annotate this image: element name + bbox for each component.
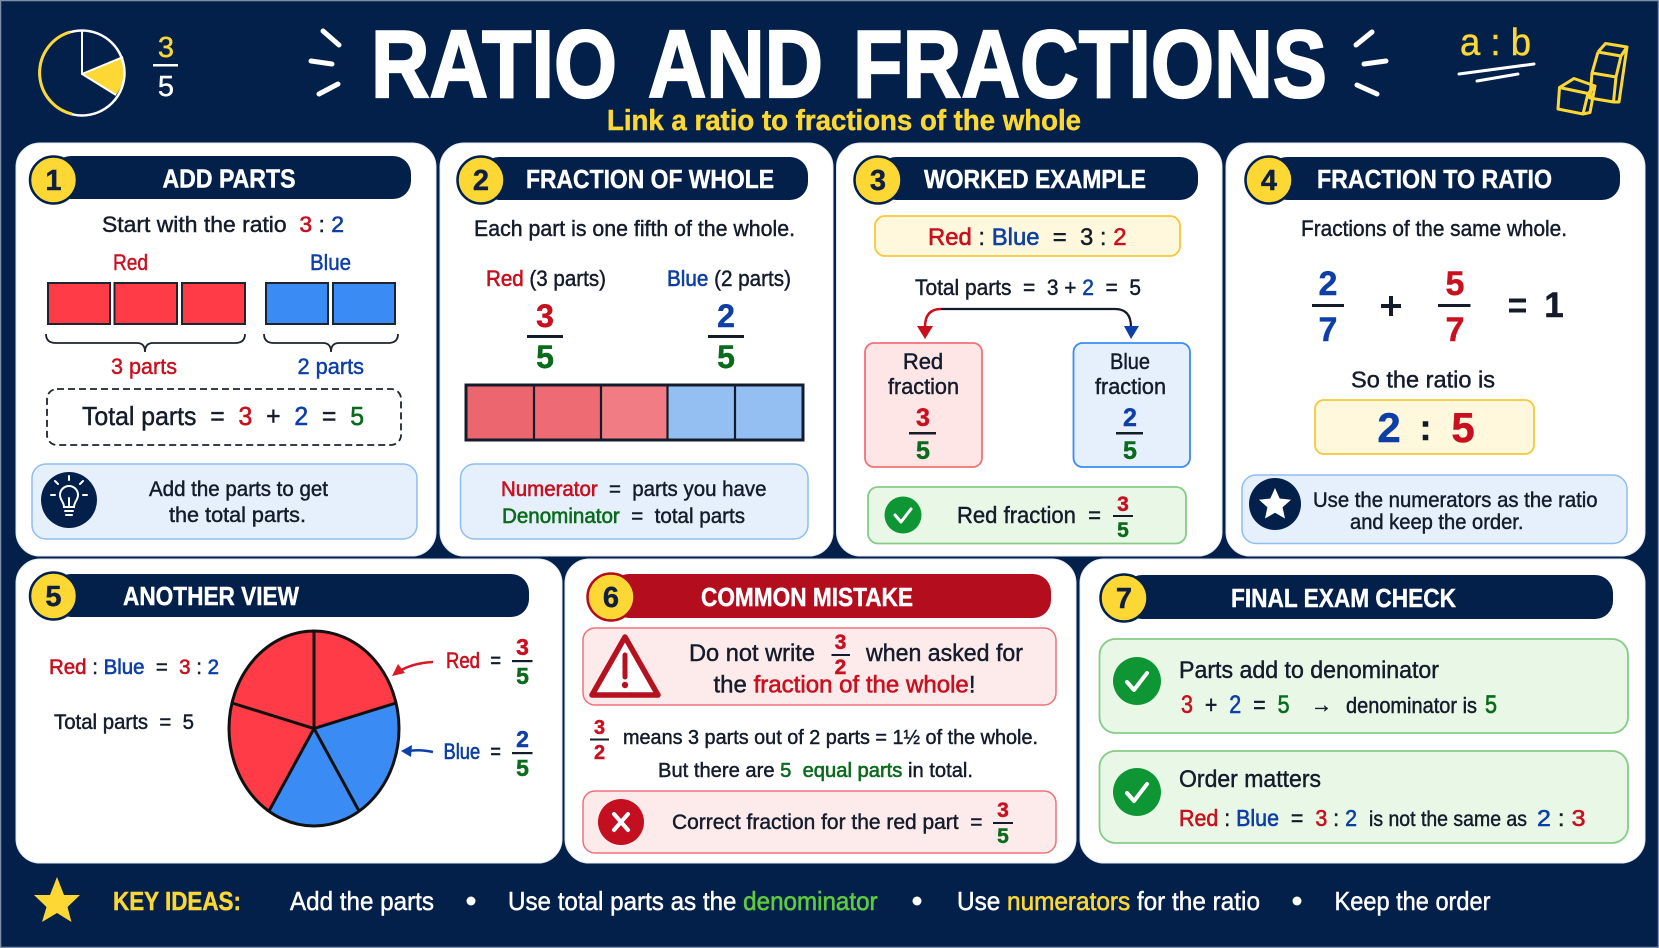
box: red fraction answer: 5: [1117, 519, 1129, 542]
brace: three parts: [46, 334, 245, 352]
dashed box: total parts: Total parts = 3 + 2 = 5: [82, 401, 364, 431]
text: each part is one fifth: Each part is one fifth of the whole.: [474, 216, 795, 241]
label: blue two fifths: 2: [516, 726, 529, 752]
heading: fraction to ratio: FRACTION TO RATIO: [1317, 164, 1552, 194]
footer: key ideas strip: [34, 877, 1491, 922]
icon: pie with fraction three fifths: [40, 30, 178, 116]
label: red: Red: [113, 250, 148, 275]
label: blue: Blue: [310, 250, 351, 275]
box: red fraction: 5: [916, 437, 930, 465]
warning box: 2: [835, 656, 846, 679]
heading: final exam check: [1100, 574, 1613, 622]
equation: equals one: [1509, 286, 1564, 325]
label: red three fifths: 5: [516, 663, 529, 689]
heading: common mistake: 6: [603, 582, 619, 614]
text: red to blue ratio: Red : Blue = 3 : 2: [49, 656, 219, 679]
heading: common mistake: COMMON MISTAKE: [701, 582, 913, 612]
check box: parts add to denominator: →: [1311, 692, 1332, 717]
fraction: two fifths: 2: [717, 298, 735, 334]
check box: order matters: Red : Blue = 3 : 2: [1179, 805, 1357, 831]
label: blue two parts: Blue (2 parts): [667, 266, 791, 291]
check box: order matters: is not the same as: [1369, 808, 1527, 831]
label: 3 parts: 3 parts: [111, 354, 177, 379]
heading: fraction to ratio: [1246, 156, 1620, 204]
box: ratio two to five: [1315, 400, 1534, 454]
check box: parts add to denominator: Parts add to denominator: [1179, 657, 1439, 684]
box: correct fraction: 5: [997, 825, 1009, 848]
box: blue fraction: [1074, 343, 1190, 467]
box: blue fraction: 2: [1123, 404, 1137, 432]
label: red three fifths: Red =: [446, 648, 501, 673]
box: blue fraction: 5: [1123, 437, 1137, 465]
panel: add parts: [16, 143, 436, 556]
heading: another view: ANOTHER VIEW: [123, 581, 299, 611]
heading: add parts: [30, 156, 411, 204]
heading: another view: [30, 572, 529, 620]
check box: parts add to denominator: 5: [1485, 691, 1497, 719]
heading: fraction of whole: FRACTION OF WHOLE: [526, 164, 774, 194]
box: ratio two to five: 5: [1451, 404, 1475, 451]
title: RATIO: [371, 11, 617, 118]
text: numerators for the ratio: Use numerators for the ratio: [957, 886, 1260, 916]
box: correct fraction: [583, 791, 1056, 853]
icon: check: [884, 496, 922, 534]
decoration: right title sparks: [1356, 32, 1386, 94]
text: add the parts: Add the parts: [290, 886, 434, 916]
dashed box: total parts: [47, 389, 401, 445]
box: ratio two to five: :: [1420, 407, 1432, 448]
fraction: two sevenths: 2: [1319, 265, 1337, 303]
text: total parts sum: Total parts = 3 + 2 = 5: [915, 275, 1141, 300]
icon: yellow star: [34, 877, 80, 922]
heading: another view: 5: [45, 581, 62, 613]
symbol: plus: [1381, 296, 1401, 316]
explanation: three over two: 2: [594, 742, 605, 764]
callout: add the parts: Add the parts to get: [149, 478, 328, 501]
callout: add the parts: the total parts.: [169, 504, 306, 527]
callout: numerator and denominator: Numerator = parts you have: [501, 477, 766, 501]
icon: light bulb: [41, 472, 97, 528]
pie chart: three red and two blue parts: [229, 631, 399, 826]
text: five equal parts: But there are 5 equal parts in total.: [658, 759, 973, 782]
heading: worked example: WORKED EXAMPLE: [924, 164, 1146, 194]
panel: worked example: [836, 143, 1222, 556]
title: [371, 11, 1327, 118]
panel: common mistake: [565, 559, 1076, 863]
text: fractions of the same whole: Fractions of the same whole.: [1301, 216, 1567, 241]
heading: add parts: 1: [45, 165, 62, 197]
callout: add the parts: [32, 464, 417, 539]
explanation: three over two: 3: [594, 717, 605, 739]
check box: order matters: Order matters: [1179, 766, 1321, 793]
heading: worked example: 3: [870, 165, 886, 197]
heading: worked example: [854, 156, 1198, 204]
subtitle: Link a ratio to fractions of the whole: [607, 105, 1081, 137]
check box: parts add to denominator: 3 + 2 = 5: [1181, 691, 1290, 719]
label: red three fifths: [446, 634, 532, 689]
check box: parts add to denominator: [1100, 639, 1628, 733]
box: correct fraction: 3: [997, 799, 1009, 822]
equation: equals one: 1: [1544, 286, 1564, 325]
box: red fraction answer: Red fraction =: [957, 502, 1101, 528]
box: blue fraction: fraction: [1095, 374, 1166, 399]
fraction: three fifths: [527, 298, 563, 375]
fraction: two fifths: 5: [717, 339, 735, 375]
title: FRACTIONS: [853, 11, 1327, 118]
heading: common mistake: [588, 574, 1051, 620]
warning box: the fraction of the whole!: [714, 672, 976, 698]
bar: two blue parts: [266, 283, 395, 324]
fraction: five sevenths: [1438, 265, 1470, 349]
label: red three fifths: 3: [516, 634, 529, 660]
icon: pie with fraction three fifths: 5: [158, 71, 174, 103]
heading: fraction of whole: [458, 156, 808, 204]
heading: final exam check: 7: [1116, 583, 1132, 615]
fraction: three fifths: 5: [536, 339, 554, 375]
text: total parts equals five: Total parts = 5: [54, 711, 194, 734]
fraction: two fifths: [708, 298, 744, 375]
arrow: to blue fraction: [941, 309, 1139, 339]
box: correct fraction: Correct fraction for the red part =: [672, 811, 982, 834]
explanation: three over two: means 3 parts out of 2 parts = 1½ of the whole.: [623, 727, 1038, 749]
text: keep the order: Keep the order: [1334, 886, 1491, 916]
fraction: two sevenths: [1312, 265, 1344, 349]
icon: check: [1113, 657, 1161, 705]
box: blue fraction: Blue: [1110, 349, 1150, 374]
label: red three parts: Red (3 parts): [486, 266, 606, 291]
box: red fraction answer: [868, 487, 1186, 544]
label: 2 parts: 2 parts: [298, 354, 364, 379]
callout: use the numerators: Use the numerators as the ratio: [1313, 489, 1598, 512]
panel: fraction of whole: [440, 143, 833, 556]
panel: another view: [16, 559, 562, 863]
bar: five equal parts: [466, 385, 803, 440]
box: red fraction answer: 3: [1117, 493, 1129, 516]
label: blue two fifths: 5: [516, 755, 529, 781]
callout: numerator and denominator: [460, 464, 808, 539]
fraction: five sevenths: 7: [1446, 311, 1464, 349]
fraction: three fifths: 3: [536, 298, 554, 334]
fraction: five sevenths: 5: [1446, 265, 1464, 303]
text: start with the ratio: Start with the ratio 3 : 2: [102, 212, 344, 237]
check box: order matters: [1100, 751, 1628, 843]
text: so the ratio is: So the ratio is: [1351, 366, 1495, 392]
heading: final exam check: FINAL EXAM CHECK: [1231, 583, 1456, 613]
box: ratio two to five: 2: [1377, 404, 1401, 451]
bar: three red parts: [48, 283, 245, 324]
panel: final exam check: [1080, 559, 1645, 863]
heading: fraction to ratio: 4: [1261, 165, 1277, 197]
title: AND: [648, 11, 823, 118]
panel: fraction to ratio: [1226, 143, 1645, 556]
callout: use the numerators: and keep the order.: [1350, 511, 1524, 534]
box: red fraction: 3: [916, 404, 930, 432]
check box: order matters: 2 : 3: [1537, 805, 1586, 831]
warning box: 3: [835, 631, 846, 654]
icon: stacked cubes: [1558, 44, 1627, 114]
box: red fraction: [865, 343, 982, 467]
icon: warning triangle: [592, 637, 658, 695]
label: key ideas: KEY IDEAS:: [113, 886, 241, 916]
icon: red cross: [598, 799, 644, 845]
arrow: blue callout: [401, 745, 433, 757]
heading: fraction of whole: 2: [473, 165, 489, 197]
warning box: [583, 628, 1056, 705]
text: total parts as denominator: Use total parts as the denominator: [508, 886, 878, 916]
box: red to blue ratio: Red : Blue = 3 : 2: [928, 224, 1126, 251]
decoration: left title sparks: [311, 31, 339, 94]
callout: numerator and denominator: Denominator = total parts: [502, 504, 745, 528]
brace: two parts: [264, 334, 398, 352]
check box: parts add to denominator: denominator is: [1346, 693, 1477, 718]
fraction: two sevenths: 7: [1319, 311, 1337, 349]
box: red to blue ratio: [875, 216, 1180, 256]
box: red fraction: fraction: [888, 374, 959, 399]
icon: check: [1113, 768, 1161, 816]
icon: a to b ratio note: a : b: [1460, 22, 1531, 64]
explanation: three over two: [590, 717, 1038, 764]
heading: add parts: ADD PARTS: [162, 164, 296, 194]
box: red fraction: Red: [903, 349, 943, 374]
icon: pie with fraction three fifths: 3: [158, 32, 174, 64]
callout: use the numerators: [1242, 475, 1627, 544]
label: blue two fifths: [444, 726, 532, 781]
label: blue two fifths: Blue =: [444, 739, 501, 764]
arrow: red callout: [392, 662, 433, 676]
icon: star: [1249, 478, 1301, 530]
warning box: when asked for: [865, 640, 1023, 667]
arrow: to red fraction: [917, 309, 941, 339]
warning box: Do not write: [689, 640, 815, 667]
